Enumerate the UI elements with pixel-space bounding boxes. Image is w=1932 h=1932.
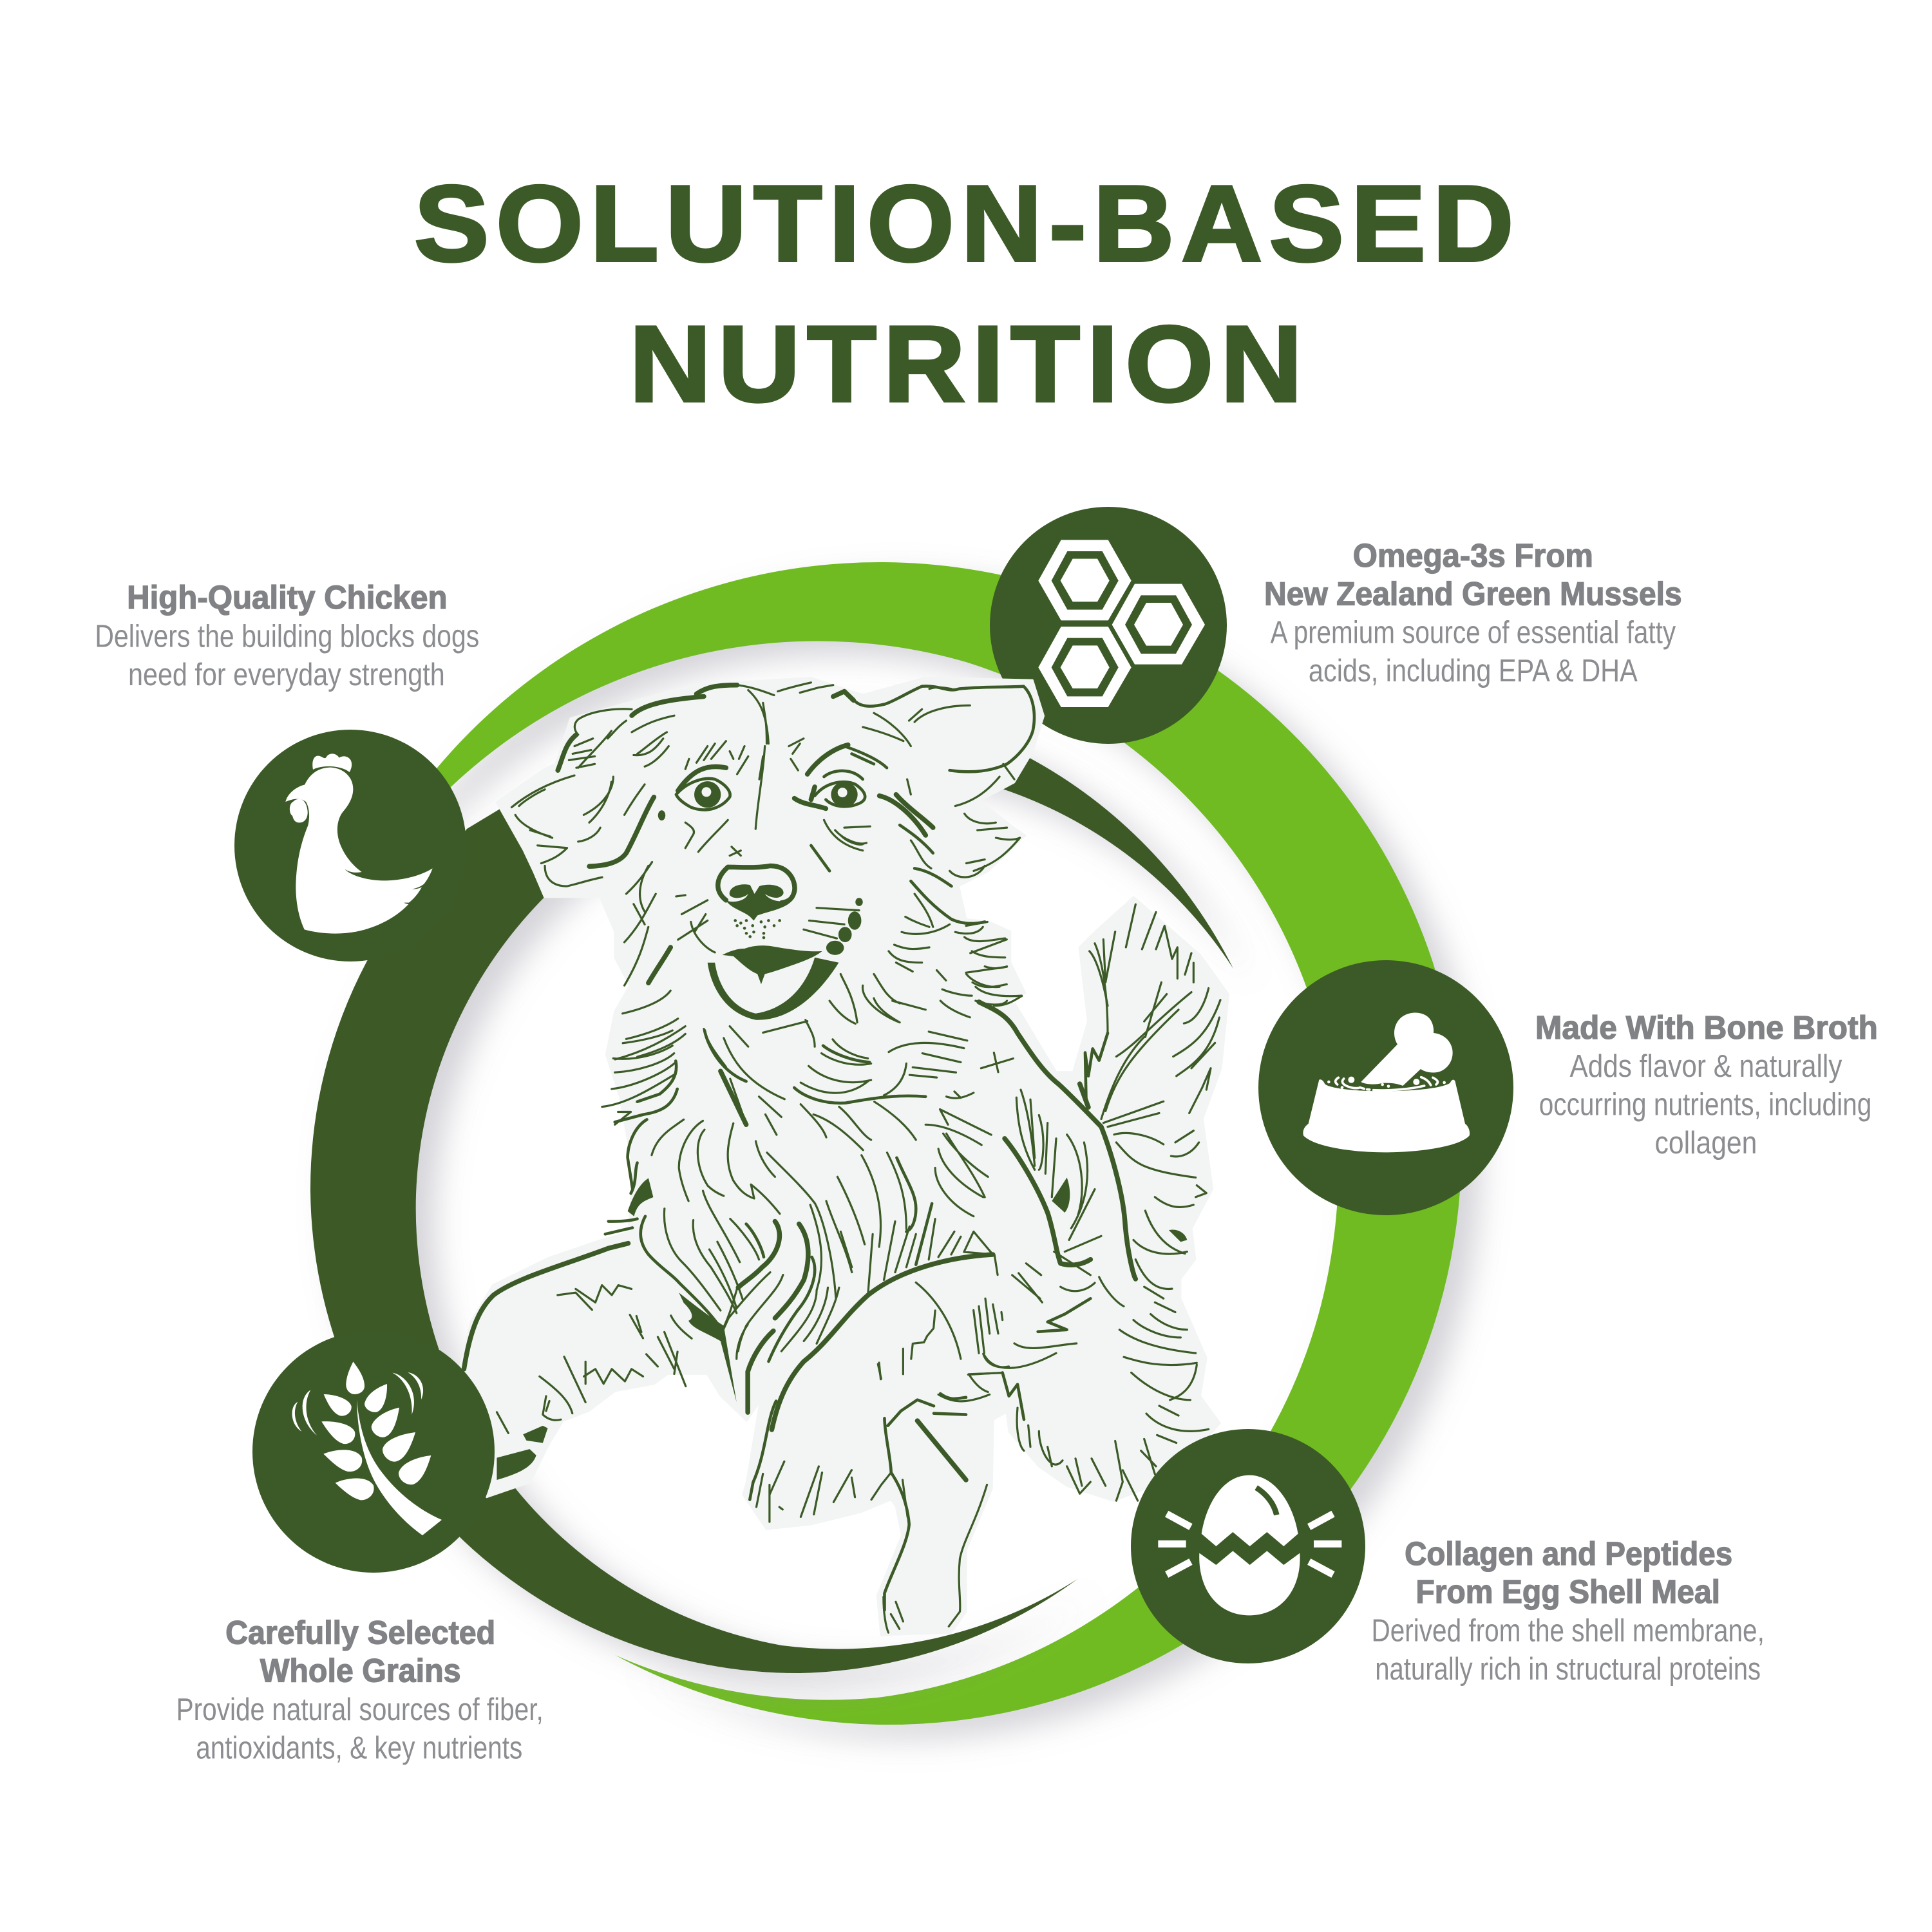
icon badge: whole grains xyxy=(252,1331,495,1573)
text: omega-3s: New Zealand Green Mussels xyxy=(1264,575,1682,612)
text: whole grains: Provide natural sources of fiber, xyxy=(176,1692,544,1727)
text: collagen and peptides xyxy=(1372,1535,1765,1687)
icon badge: chicken xyxy=(234,730,466,961)
text: bone broth: Made With Bone Broth xyxy=(1535,1009,1878,1046)
text: whole grains xyxy=(176,1614,544,1765)
text: omega-3s: Omega-3s From xyxy=(1353,537,1593,574)
dog mouth xyxy=(723,945,822,984)
title: NUTRITION xyxy=(629,303,1309,424)
text blocks xyxy=(95,537,1878,1765)
title xyxy=(414,163,1520,424)
dog cheek marks xyxy=(658,810,863,955)
text: bone broth xyxy=(1535,1009,1878,1160)
icon badge: bone in bowl xyxy=(1258,960,1513,1215)
text: bone broth: occurring nutrients, including xyxy=(1539,1088,1871,1122)
icon: bowl with bone xyxy=(1303,1012,1470,1152)
text: collagen and peptides: naturally rich in structural proteins xyxy=(1375,1652,1761,1687)
fur: chest and body xyxy=(602,1030,1009,1430)
fur: head and face xyxy=(511,683,1034,1067)
green crescent ring xyxy=(399,562,1462,1725)
text: whole grains: Whole Grains xyxy=(260,1653,461,1689)
text: omega-3s: A premium source of essential fatty xyxy=(1271,616,1676,650)
text: bone broth: collagen xyxy=(1655,1126,1757,1160)
dog tongue outline xyxy=(708,958,838,1020)
icon badge: cracked egg xyxy=(1131,1429,1365,1663)
icon: egg xyxy=(1158,1475,1341,1615)
title: SOLUTION-BASED xyxy=(414,163,1520,284)
dog nose xyxy=(726,884,793,920)
dog eyes xyxy=(694,781,858,808)
icon: chicken xyxy=(285,753,433,934)
text: collagen and peptides: Derived from the shell membrane, xyxy=(1372,1614,1765,1649)
dog silhouette xyxy=(460,677,1229,1635)
text: collagen and peptides: Collagen and Peptides xyxy=(1405,1535,1732,1572)
text: omega-3s xyxy=(1264,537,1682,688)
fur: front leg and paws xyxy=(464,1244,966,1610)
dark green crescent ring xyxy=(310,703,1233,1673)
text: high-quality chicken: need for everyday strength xyxy=(128,658,445,692)
text: collagen and peptides: From Egg Shell Meal xyxy=(1416,1573,1720,1610)
text: whole grains: Carefully Selected xyxy=(225,1614,495,1651)
dog muzzle stipple xyxy=(735,920,780,938)
icon: three hexagons xyxy=(1038,540,1205,707)
text: whole grains: antioxidants, & key nutrients xyxy=(196,1730,522,1765)
text: high-quality chicken xyxy=(95,579,479,692)
icon: wheat stalk xyxy=(292,1361,442,1535)
fur: standing leg xyxy=(884,1485,987,1633)
text: omega-3s: acids, including EPA & DHA xyxy=(1309,654,1638,688)
text: bone broth: Adds flavor & naturally xyxy=(1570,1049,1842,1084)
text: high-quality chicken: Delivers the building blocks dogs xyxy=(95,619,479,654)
fur: tail and rear xyxy=(966,904,1220,1501)
dog illustration xyxy=(460,677,1229,1635)
text: high-quality chicken: High-Quality Chicken xyxy=(127,579,448,616)
icon badge: hexagons omega-3 xyxy=(990,507,1227,744)
